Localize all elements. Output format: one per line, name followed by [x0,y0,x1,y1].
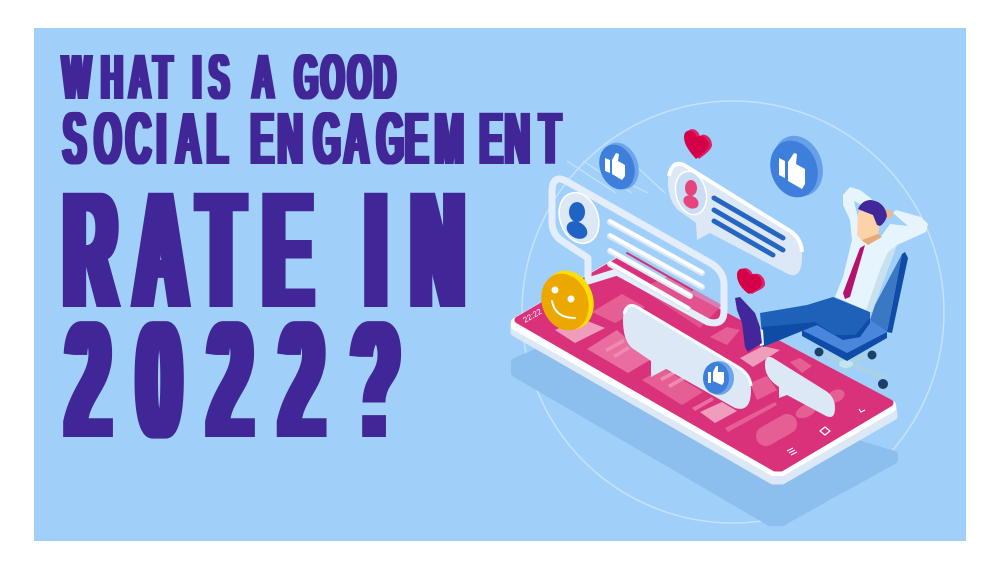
title [62,41,561,473]
nav icon: home [820,427,830,435]
title line: 2022?: 2022? [67,288,399,473]
phone shadow [515,349,894,522]
heart top [684,129,712,159]
chair [802,252,908,389]
man on chair [735,187,928,389]
title line: what is a good: WHAT IS A GOOD [62,41,396,113]
title line: rate in: RATE IN [65,158,463,343]
radiating lines [567,161,665,193]
bubble body [668,163,802,275]
like badge small [593,137,645,195]
status time: 22:22 [522,307,544,325]
shirt shade [866,245,897,312]
bubble avatar [671,168,711,218]
like badge [703,361,734,395]
smiley coin [533,264,602,337]
bubble text lines [610,221,702,309]
phone screen [518,260,890,468]
screen content blocks [555,276,847,436]
phone [515,260,893,480]
nav icon: menu [787,448,797,455]
legs [760,297,870,347]
small white speech bubble [765,357,835,417]
decorative circle outline [522,101,944,523]
bubble avatar [552,187,606,249]
bubble text lines [714,198,783,255]
nav icon: back [859,409,865,412]
sock [758,328,764,346]
large white speech bubble [623,305,751,409]
like badge large [762,129,831,204]
blue speech bubble [668,163,802,275]
bubble outline [552,179,724,323]
title line: social engagement: SOCIAL ENGAGEMENT [63,99,561,181]
tie [843,245,865,299]
shoe [735,297,762,352]
heart lower [737,268,765,294]
illustration [515,101,944,523]
phone edge [515,262,893,480]
head [857,205,880,243]
shirt [835,187,928,312]
outlined speech bubble [552,179,724,323]
